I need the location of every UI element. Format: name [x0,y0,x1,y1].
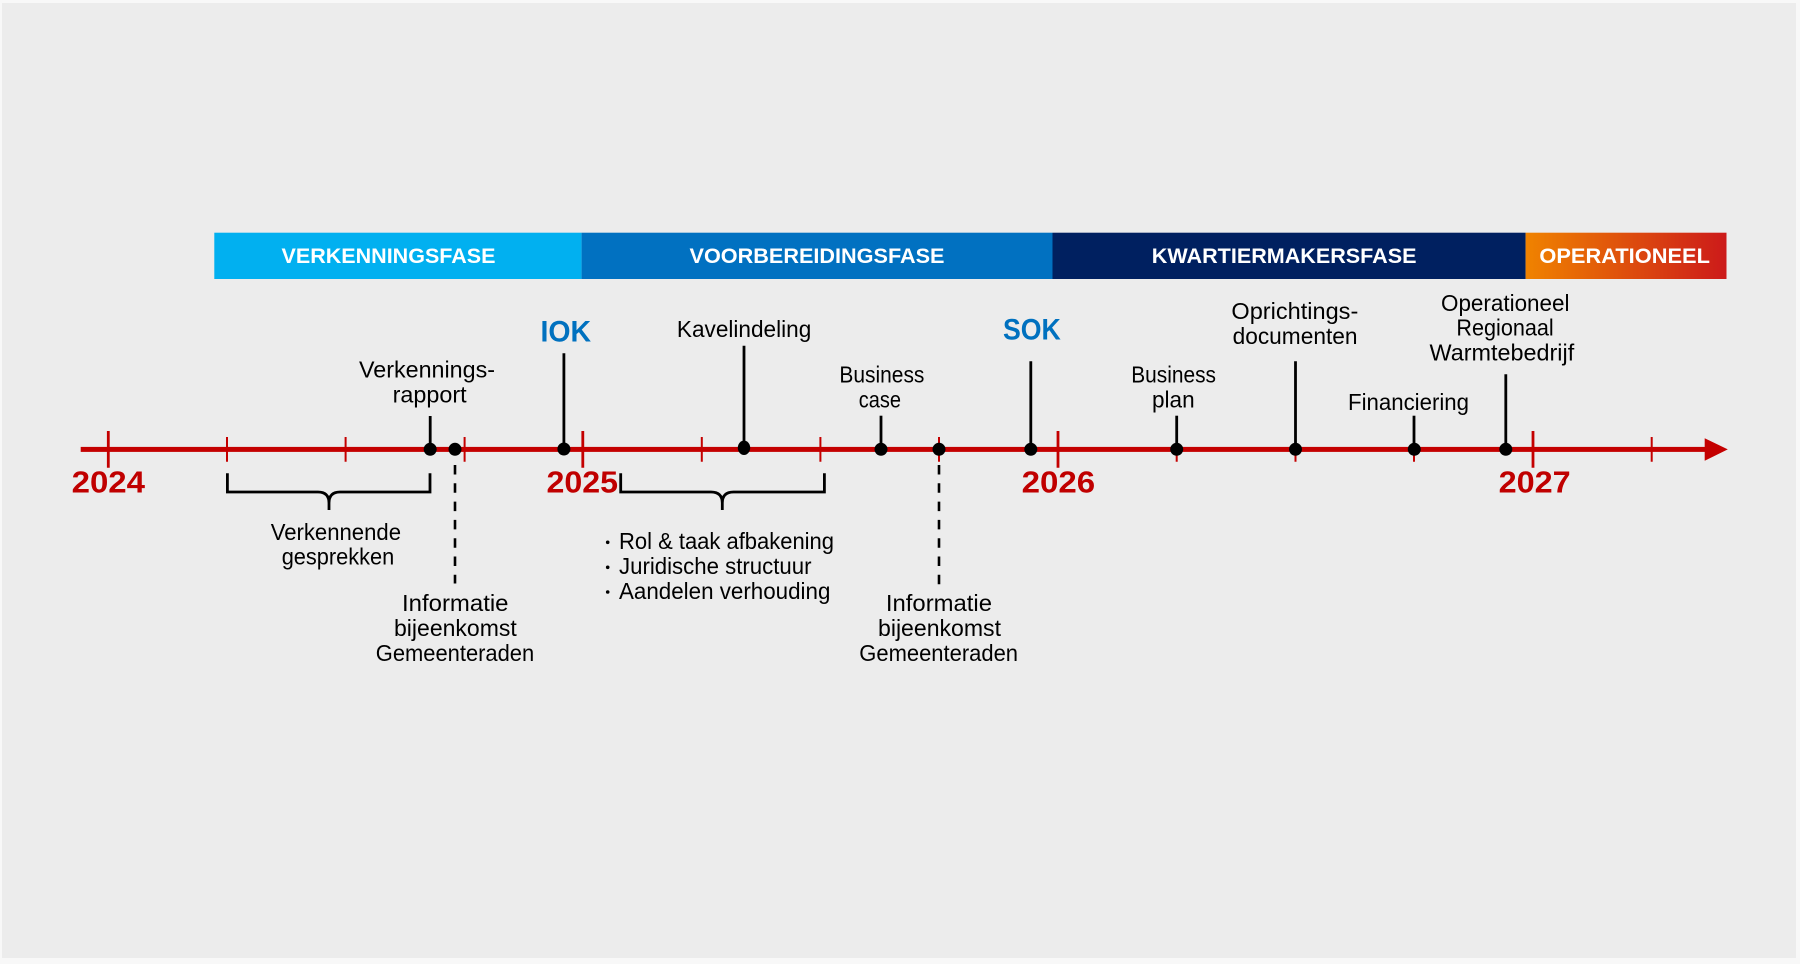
milestone: business plan [1131,361,1216,456]
phase: voorbereidingsfase [582,233,1052,279]
milestone: business plan: Business [1131,361,1216,387]
year labels: 2027 [1499,465,1571,500]
milestone: verkenningsrapport: Verkennings- [359,357,495,383]
info meeting 1: informatie bijeenkomst gemeenteraden [376,443,534,666]
phase: verkenningsfase [214,233,582,279]
milestone: IOK: IOK [540,316,591,349]
phase: kwartiermakersfase [1052,233,1526,279]
milestone: operationeel regionaal warmtebedrijf: Warmtebedrijf [1430,340,1575,366]
brace: verkennende gesprekken: gesprekken [282,543,394,569]
milestone: oprichtingsdocumenten [1231,298,1358,456]
milestone: financiering: Financiering [1348,389,1469,415]
milestone: operationeel regionaal warmtebedrijf [1430,290,1575,456]
milestone: IOK [540,316,591,456]
brace: verkennende gesprekken: Verkennende [271,519,401,545]
info meeting 2: informatie bijeenkomst gemeenteraden [859,443,1018,666]
phase: operationeel: OPERATIONEEL [1539,245,1710,268]
info meeting 2: informatie bijeenkomst gemeenteraden: bijeenkomst [878,615,1001,641]
phase: kwartiermakersfase: KWARTIERMAKERSFASE [1152,245,1416,268]
info meeting 2: informatie bijeenkomst gemeenteraden: Informatie [886,590,992,616]
milestone: operationeel regionaal warmtebedrijf: Regionaal [1456,315,1554,341]
milestone: business case [839,361,924,456]
year labels [72,465,1571,500]
brace: voorbereidingsonderwerpen: Juridische structuur [619,553,812,579]
brace: verkennende gesprekken [227,473,430,569]
brace: voorbereidingsonderwerpen: Rol & taak afbakening [619,528,834,554]
milestone: business plan: plan [1152,386,1195,412]
milestone: oprichtingsdocumenten: Oprichtings- [1231,298,1358,324]
milestone: operationeel regionaal warmtebedrijf: Operationeel [1441,290,1570,316]
info meeting 1: informatie bijeenkomst gemeenteraden: bijeenkomst [394,615,517,641]
milestone: verkenningsrapport [359,357,495,456]
milestone: verkenningsrapport: rapport [393,382,467,408]
milestone: financiering [1348,389,1469,456]
milestone: kavelindeling: Kavelindeling [677,316,811,342]
year labels: 2024 [72,465,146,500]
phase: operationeel [1526,233,1726,279]
milestone: SOK: SOK [1003,314,1061,346]
milestone: kavelindeling [677,316,811,455]
timeline axis with arrow and ticks [81,431,1728,468]
milestone: business case: Business [839,361,924,387]
info meeting 1: informatie bijeenkomst gemeenteraden: Gemeenteraden [376,640,534,666]
phase: voorbereidingsfase: VOORBEREIDINGSFASE [690,245,944,268]
year labels: 2026 [1022,465,1095,500]
year labels: 2025 [546,465,618,500]
phase: verkenningsfase: VERKENNINGSFASE [282,245,496,268]
milestone: SOK [1003,314,1061,456]
phase bar [214,233,1726,279]
milestone: oprichtingsdocumenten: documenten [1233,323,1358,349]
milestone: business case: case [859,386,901,412]
info meeting 2: informatie bijeenkomst gemeenteraden: Gemeenteraden [859,640,1018,666]
info meeting 1: informatie bijeenkomst gemeenteraden: Informatie [402,590,508,616]
brace: voorbereidingsonderwerpen [606,473,834,604]
brace: voorbereidingsonderwerpen: Aandelen verhouding [619,578,830,604]
